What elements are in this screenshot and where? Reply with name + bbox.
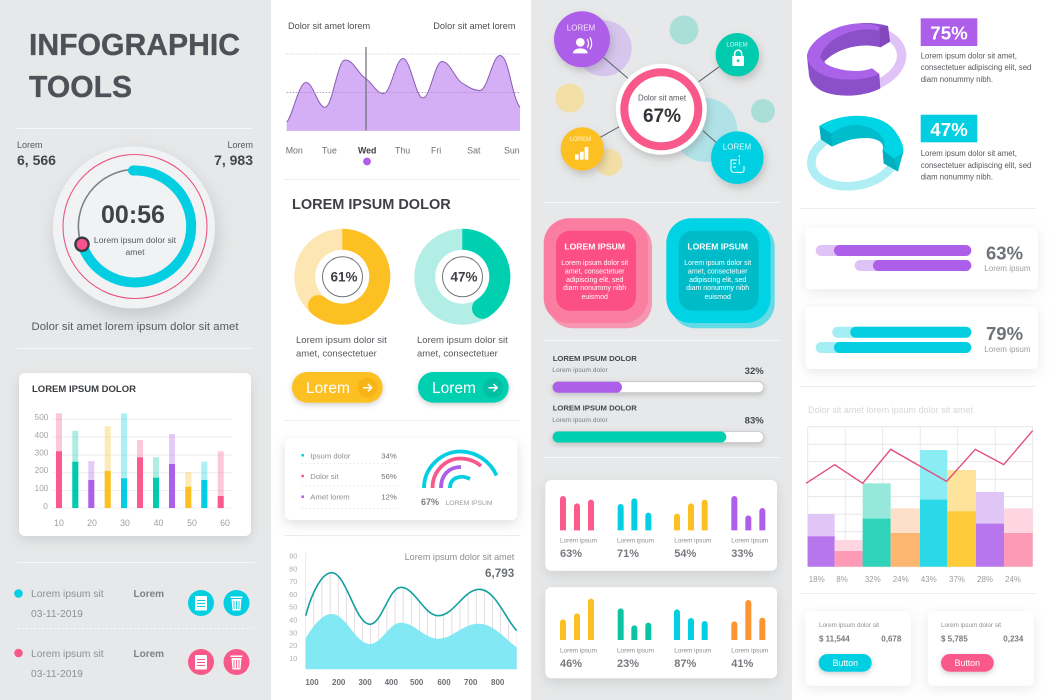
panel: stacked bar chart card: 10 (54, 518, 64, 528)
panel: legend and arcs card: 56% (381, 472, 397, 481)
area chart: weekly: Thu (395, 145, 410, 155)
progress bar: 83%: Lorem ipsum dolor (552, 417, 608, 424)
bubble: center 67%: Dolor sit amet (638, 94, 687, 102)
panel: button card cyan: $ 11,544 (819, 634, 850, 644)
button: yellow (292, 372, 383, 403)
bubble: yellow (561, 127, 604, 171)
area chart: lower: 6,793 (485, 567, 515, 580)
area chart: lower: 600 (437, 678, 451, 687)
title: INFOGRAPHIC (29, 28, 240, 62)
list row 2: Lorem ipsum sit (31, 649, 104, 660)
list row 2: 03-11-2019 (31, 669, 83, 680)
list divider (18, 628, 255, 630)
donut: 47%: amet, consectetuer (417, 348, 498, 360)
timer dial: amet (125, 247, 145, 257)
panel: button card pink: $ 5,785 (941, 634, 968, 644)
area chart: lower: 200 (332, 678, 346, 687)
area chart: lower: 500 (410, 678, 424, 687)
list row 1: Lorem (134, 589, 164, 600)
panel: legend and arcs card: 67% (421, 497, 439, 507)
stat: 47% (921, 115, 1031, 182)
area chart: weekly: Dolor sit amet lorem (433, 21, 516, 31)
panel: legend and arcs card: LOREM IPSUM (446, 500, 493, 507)
list row 1 (14, 589, 250, 620)
panel: 79% bars card: 79% (986, 323, 1023, 344)
area chart: lower: 400 (385, 678, 399, 687)
dial caption: Dolor sit amet lorem ipsum dolor sit amet (32, 321, 239, 333)
panel: mini bars card bottom: Lorem ipsum (617, 648, 654, 654)
combo chart: bars and line: 8% (836, 575, 848, 584)
area chart: lower: 30 (289, 628, 297, 637)
panel: stacked bar chart card: 60 (220, 518, 230, 528)
3D ring: cyan (807, 116, 903, 193)
panel: mini bars card top: Lorem ipsum (560, 538, 597, 544)
bubble: green (716, 33, 759, 76)
area chart: lower: 50 (289, 603, 297, 612)
stat: left counter: Lorem (17, 140, 43, 150)
area chart: weekly: Sun (504, 145, 520, 155)
panel: mini bars card top: 63% (560, 548, 582, 560)
panel: button card pink: 0,234 (1003, 634, 1024, 644)
donut: 61%: amet, consectetuer (296, 348, 377, 360)
area chart: lower: 800 (491, 678, 505, 687)
combo chart: bars and line (806, 427, 1033, 584)
area chart: weekly: Wed (358, 145, 376, 155)
stat: 47%: 47% (930, 119, 968, 140)
area chart: lower: Lorem ipsum dolor sit amet (405, 552, 515, 562)
combo chart: bars and line: 28% (977, 575, 993, 584)
panel: stacked bar chart card: LOREM IPSUM DOLOR (32, 384, 136, 395)
timer dial: 00:56 (101, 201, 165, 229)
panel: cyan rounded card: diam nonummy nibh (686, 285, 749, 292)
heading: combo chart: Dolor sit amet lorem ipsum dolor sit amet (808, 405, 973, 415)
stat: 47%: consectetuer adipiscing elit, sed (921, 161, 1031, 170)
stat: 75%: 75% (930, 22, 968, 44)
area chart: weekly: Tue (322, 145, 337, 155)
panel: mini bars card top: Lorem ipsum (617, 538, 654, 544)
panel: stacked bar chart card: 200 (35, 466, 49, 475)
panel: pink rounded card: adipiscing elit, sed (566, 277, 623, 284)
stat: right counter: Lorem (227, 140, 253, 150)
panel: mini bars card top: Lorem ipsum (674, 538, 711, 544)
stat: 75%: diam nonummy nibh. (921, 75, 993, 84)
area chart: lower: 700 (464, 678, 478, 687)
panel: mini bars card top: Lorem ipsum (731, 538, 768, 544)
progress bar: 83%: LOREM IPSUM DOLOR (553, 403, 637, 412)
button: green (418, 372, 509, 403)
panel: cyan rounded card: Lorem ipsum dolor sit (684, 260, 751, 267)
combo chart: bars and line: 18% (809, 575, 825, 584)
panel: mini bars card bottom: 23% (617, 658, 639, 670)
panel: legend and arcs card: Dolor sit (310, 472, 339, 481)
panel: mini bars card bottom: Lorem ipsum (731, 648, 768, 654)
panel: stacked bar chart card: 50 (187, 518, 197, 528)
panel: legend and arcs card: 12% (381, 493, 397, 502)
list row 2: Lorem (134, 649, 164, 660)
heading: donuts: LOREM IPSUM DOLOR (292, 197, 451, 213)
donut: 61% (296, 239, 387, 360)
stat: right counter (214, 140, 253, 168)
panel: pink rounded card: amet, consectetuer (565, 268, 625, 276)
bubble: purple (554, 11, 610, 67)
panel: stacked bar chart card (19, 373, 251, 536)
panel: mini bars card top: 33% (731, 548, 754, 560)
panel: legend and arcs card: 34% (381, 451, 397, 460)
panel: 63% bars card: Lorem ipsum (984, 264, 1031, 273)
panel: button card cyan: 0,678 (881, 634, 902, 644)
area chart: lower: 90 (289, 552, 297, 560)
stat: 75%: consectetuer adipiscing elit, sed (921, 63, 1031, 72)
area chart: lower: 20 (289, 641, 297, 650)
area chart: lower: 80 (289, 564, 297, 573)
donut: 61%: 61% (330, 270, 358, 284)
stat: left counter: 6, 566 (17, 152, 56, 168)
panel: pink rounded card (544, 218, 652, 328)
panel: mini bars card top (545, 480, 777, 571)
area chart: weekly: Sat (467, 145, 481, 155)
combo chart: bars and line: 37% (949, 575, 965, 584)
title: TOOLS (29, 70, 132, 104)
area chart: weekly: Fri (431, 145, 441, 155)
panel: mini bars card bottom: 41% (731, 658, 754, 670)
area chart: weekly: Mon (286, 145, 303, 155)
panel: button card cyan (805, 611, 911, 686)
progress bar: 83% (552, 403, 764, 442)
panel: stacked bar chart card: 300 (35, 448, 49, 458)
panel: button card cyan: Lorem ipsum dolor sit (819, 622, 879, 629)
panel: 63% bars card (805, 228, 1038, 289)
panel: cyan rounded card: adipiscing elit, sed (689, 277, 746, 284)
panel: pink rounded card: euismod (581, 294, 608, 301)
progress bar: 32%: 32% (745, 366, 764, 377)
bubble: green: LOREM (726, 42, 748, 48)
bubble: center 67% (616, 64, 707, 155)
area chart: weekly (286, 21, 520, 165)
panel: cyan rounded card: amet, consectetuer (688, 268, 748, 276)
donut: 47%: 47% (450, 270, 478, 284)
combo chart: bars and line: 24% (893, 575, 909, 584)
panel: stacked bar chart card: 20 (87, 518, 97, 528)
panel: legend and arcs card (285, 438, 517, 520)
panel: stacked bar chart card: 500 (35, 413, 49, 422)
progress bar: 32% (552, 354, 764, 393)
timer dial (53, 146, 215, 308)
bubble: yellow: LOREM (570, 137, 591, 143)
area chart: weekly: Dolor sit amet lorem (288, 21, 371, 31)
panel: pink rounded card: Lorem ipsum dolor sit (561, 260, 628, 267)
stat: 75%: Lorem ipsum dolor sit amet, (921, 51, 1017, 60)
panel: legend and arcs card: Ipsum dolor (310, 451, 351, 460)
list row 1: 03-11-2019 (31, 609, 83, 620)
combo chart: bars and line: 43% (921, 575, 937, 584)
panel: stacked bar chart card: 400 (35, 431, 49, 440)
panel: cyan rounded card (666, 218, 775, 328)
area chart: lower: 10 (289, 654, 297, 663)
bubble diagram (554, 11, 775, 184)
panel: mini bars card top: 54% (674, 548, 697, 560)
panel: mini bars card bottom (545, 587, 777, 678)
stat: 75% (921, 18, 1031, 84)
panel: 79% bars card: Lorem ipsum (984, 345, 1031, 354)
panel: 63% bars card: 63% (986, 242, 1023, 263)
combo chart: bars and line: 32% (865, 575, 881, 584)
panel: stacked bar chart card: 30 (120, 518, 130, 528)
list row 2 (14, 649, 250, 680)
panel: stacked bar chart card: 40 (154, 518, 163, 528)
combo chart: bars and line: 24% (1005, 575, 1021, 584)
bubble: cyan (711, 131, 764, 184)
stat: left counter (17, 140, 56, 168)
panel: cyan rounded card: LOREM IPSUM (687, 241, 748, 251)
list row 1: Lorem ipsum sit (31, 589, 104, 600)
stat: right counter: 7, 983 (214, 152, 253, 168)
bubble: center 67%: 67% (643, 106, 681, 127)
panel: button card pink: Lorem ipsum dolor sit (941, 622, 1001, 629)
panel: pink rounded card: diam nonummy nibh (563, 285, 626, 292)
progress bar: 32%: LOREM IPSUM DOLOR (553, 354, 637, 363)
area chart: lower: 100 (305, 678, 319, 687)
panel: legend and arcs card: Amet lorem (310, 493, 350, 502)
button: yellow: Lorem (306, 380, 350, 397)
panel: 79% bars card (805, 307, 1038, 369)
panel: stacked bar chart card: 100 (35, 484, 49, 493)
area chart: lower: 70 (289, 577, 297, 586)
timer dial: Lorem ipsum dolor sit (94, 235, 177, 245)
button: green: Lorem (432, 380, 476, 397)
panel: mini bars card top: 71% (617, 548, 639, 560)
progress bar: 32%: Lorem ipsum dolor (552, 367, 608, 374)
donut: 47%: Lorem ipsum dolor sit (417, 335, 508, 346)
donut: 47% (417, 239, 508, 360)
title (29, 28, 240, 104)
panel: stacked bar chart card: 0 (43, 502, 48, 511)
bubble: cyan: LOREM (723, 143, 752, 152)
area chart: lower: 300 (358, 678, 372, 687)
panel: cyan rounded card: euismod (704, 294, 731, 301)
panel: mini bars card bottom: 87% (674, 658, 697, 670)
panel: pink rounded card: LOREM IPSUM (564, 241, 625, 251)
area chart: lower: 60 (289, 590, 297, 599)
panel: button card pink: Button (955, 658, 980, 668)
panel: button card cyan: Button (833, 658, 858, 668)
donut: 61%: Lorem ipsum dolor sit (296, 335, 387, 346)
area chart: lower (289, 550, 517, 687)
area chart: lower: 40 (289, 616, 297, 624)
bubble: purple: LOREM (567, 24, 596, 32)
stat: 47%: diam nonummy nibh. (921, 173, 993, 182)
stat: 47%: Lorem ipsum dolor sit amet, (921, 149, 1017, 158)
panel: mini bars card bottom: 46% (560, 658, 582, 670)
panel: mini bars card bottom: Lorem ipsum (560, 648, 597, 654)
panel: button card pink (928, 611, 1034, 686)
3D ring: purple (807, 23, 906, 97)
progress bar: 83%: 83% (745, 416, 764, 426)
panel: mini bars card bottom: Lorem ipsum (674, 648, 711, 654)
